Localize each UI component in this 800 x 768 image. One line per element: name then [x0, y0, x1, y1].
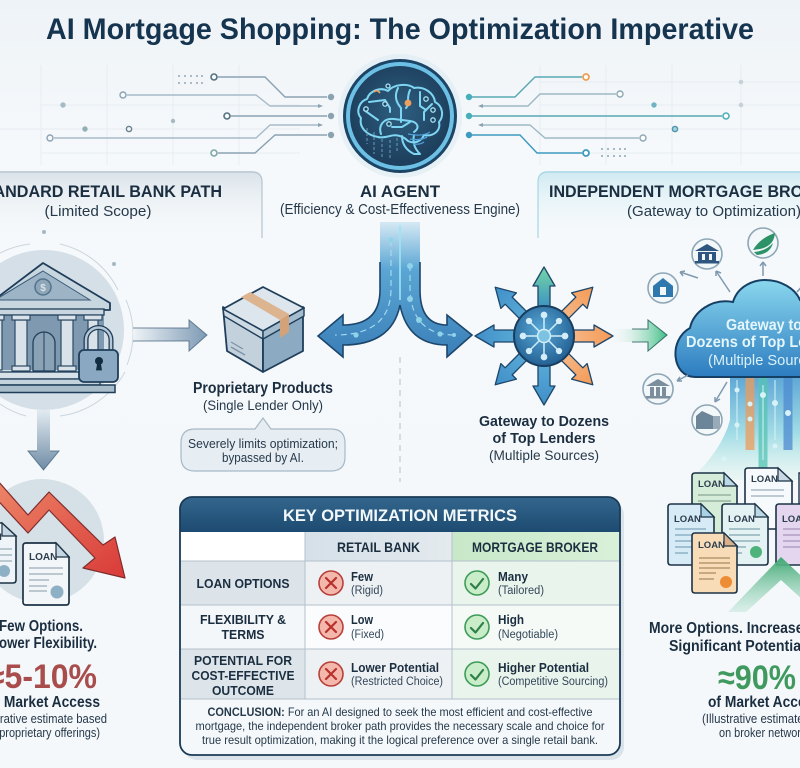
retail bank values: Low — [351, 612, 374, 627]
mortgage broker values: Many — [498, 569, 529, 584]
conclusion text: CONCLUSION: For an AI designed to seek the most efficient and cost-effective — [208, 705, 593, 719]
icon group: stack of broker loan documents — [668, 468, 800, 593]
icons: green checks — [465, 571, 489, 686]
document: pale teal — [722, 504, 768, 565]
label: AI agent: (Efficiency & Cost-Effectiveness Engine) — [280, 202, 520, 218]
text: gateway to dozens of top lenders: (Multiple Sources) — [489, 447, 599, 463]
icon: AI brain — [338, 54, 462, 178]
text: gateway to dozens of top lenders: Gateway to Dozens — [479, 413, 609, 430]
retail bank values: Few — [351, 569, 374, 584]
document: loan front — [23, 543, 69, 605]
text: bank summary — [0, 618, 107, 740]
label: AI agent — [280, 182, 520, 218]
conclusion text: mortgage, the independent broker path provides the necessary scale and choice for — [196, 719, 604, 733]
document: blue: LOAN — [674, 514, 701, 525]
text: proprietary products: Proprietary Products — [193, 380, 333, 397]
icon group: lender badges — [643, 228, 800, 435]
document: loan front: LOAN — [29, 552, 57, 563]
arrow: bank to proprietary products — [133, 320, 207, 351]
conclusion text: true result optimization, making it the logical preference over a single retail bank. — [202, 733, 598, 747]
label: AI agent: AI AGENT — [360, 182, 441, 201]
icon: cloud gateway — [675, 280, 800, 377]
retail bank values — [351, 569, 443, 688]
mortgage broker values: (Tailored) — [498, 585, 544, 597]
arrow: green upward chevron — [728, 557, 800, 612]
arrow: AI agent splits into two paths — [318, 222, 472, 357]
arrow: bank down to few options — [28, 410, 59, 470]
mortgage broker values — [498, 569, 608, 688]
row labels: COST-EFFECTIVE — [192, 668, 295, 683]
data streams from cloud to loans — [690, 377, 800, 480]
mortgage broker values: (Competitive Sourcing) — [498, 676, 608, 688]
column headers: MORTGAGE BROKER — [472, 539, 598, 555]
icon: gateway hub with radiating arrows — [475, 267, 613, 405]
row labels: OUTCOME — [212, 683, 274, 698]
table heading: KEY OPTIMIZATION METRICS — [283, 506, 517, 525]
document: pale teal: LOAN — [728, 514, 755, 525]
document: loan back — [0, 523, 16, 583]
mortgage broker values: (Negotiable) — [498, 629, 558, 641]
conclusion text — [196, 705, 604, 747]
panel: retail bank header — [0, 171, 262, 240]
row labels: TERMS — [222, 627, 265, 642]
icon: bank with padlock — [0, 230, 133, 416]
document: green: LOAN — [698, 479, 725, 490]
icon: bank with padlock: $ — [40, 283, 46, 294]
arrow: red downward trend — [0, 472, 125, 578]
document: white — [745, 468, 792, 529]
retail bank values: (Rigid) — [351, 585, 383, 597]
mortgage broker values: High — [498, 612, 524, 627]
circuit lines: right — [466, 74, 743, 157]
callout: severely limits optimization: Severely limits optimization; — [188, 437, 338, 451]
text: gateway to dozens of top lenders — [479, 413, 609, 463]
document: orange: LOAN — [698, 540, 725, 551]
title: AI Mortgage Shopping: The Optimization Imperative — [46, 13, 754, 46]
row labels: POTENTIAL FOR — [194, 653, 293, 668]
text: proprietary products: (Single Lender Only) — [203, 397, 323, 413]
document: orange — [692, 533, 737, 593]
document: blue — [668, 504, 714, 565]
arrow: gateway to cloud — [610, 320, 667, 351]
column headers: RETAIL BANK — [337, 539, 420, 555]
circuit lines: left — [47, 74, 334, 156]
text: bank summary: Few Options. — [0, 618, 83, 635]
row labels: LOAN OPTIONS — [196, 576, 290, 591]
document: purple — [776, 504, 800, 565]
subheading: gateway to optimization: (Gateway to Optimization) — [627, 203, 800, 220]
mortgage broker values: Higher Potential — [498, 660, 589, 675]
text: proprietary products — [193, 380, 333, 413]
row labels: FLEXIBILITY & — [200, 612, 286, 627]
retail bank values: Lower Potential — [351, 660, 439, 675]
column headers — [337, 539, 598, 555]
panel: key optimization metrics table — [180, 497, 624, 760]
retail bank values: (Fixed) — [351, 629, 384, 641]
retail bank values: (Restricted Choice) — [351, 676, 443, 688]
subheading: limited scope: (Limited Scope) — [44, 203, 152, 220]
panel: independent broker header — [538, 171, 800, 240]
text: gateway to dozens of top lenders: of Top Lenders — [492, 430, 596, 447]
icons: red crosses — [319, 571, 343, 686]
document: dark edge — [799, 473, 800, 505]
callout: severely limits optimization — [181, 418, 345, 471]
callout: severely limits optimization: bypassed by AI. — [222, 451, 304, 465]
document: white: LOAN — [751, 474, 778, 485]
text: broker summary — [649, 620, 800, 740]
icon: proprietary products box — [223, 287, 304, 372]
document: green — [692, 473, 737, 535]
icon group: falling options — [0, 472, 125, 605]
row labels — [192, 576, 295, 698]
